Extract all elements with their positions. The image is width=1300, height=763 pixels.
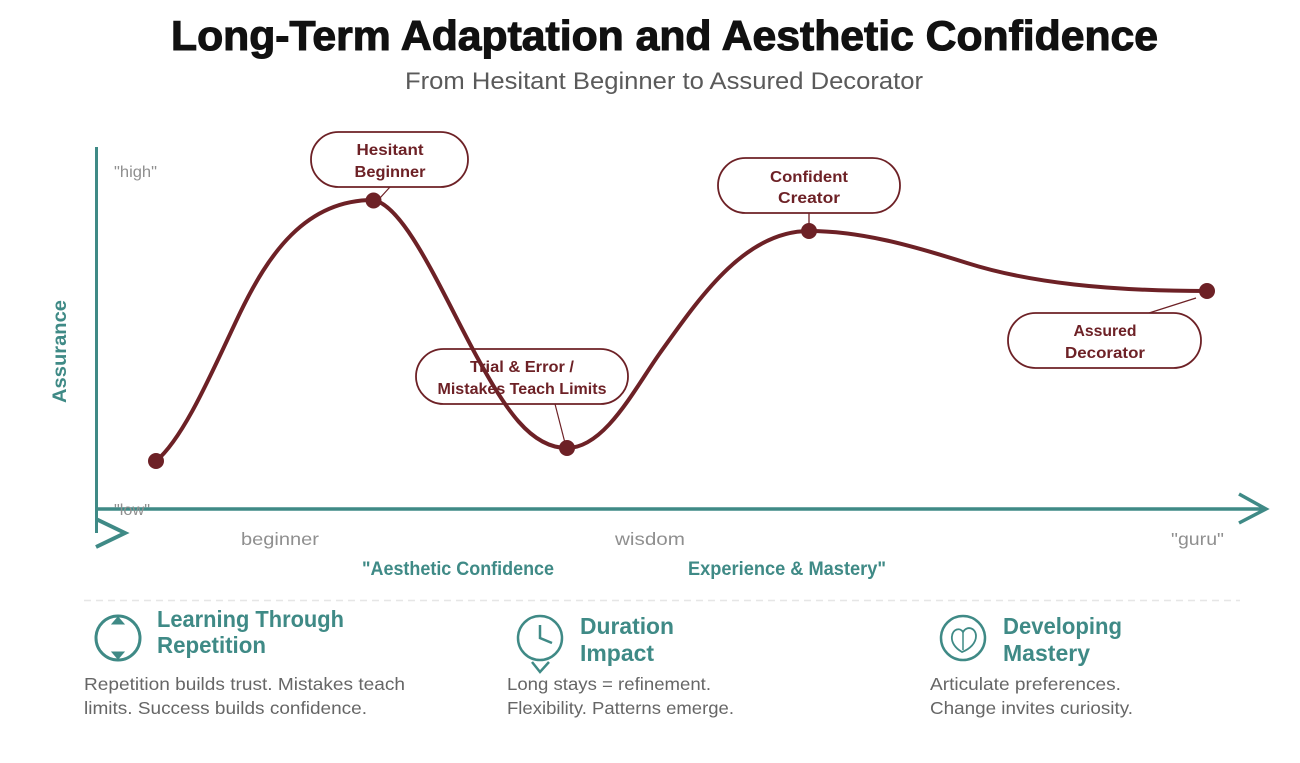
heading: Developing [1003,613,1122,639]
callout: assured decorator: Decorator [1065,345,1145,362]
heading [580,613,674,666]
body text: Repetition builds trust. Mistakes teach [84,674,405,694]
callout: confident creator [718,158,900,228]
callout: confident creator: Creator [778,190,840,207]
heading [157,606,344,658]
body text [507,674,734,718]
label: low: "low" [114,502,150,519]
icon: clock [518,616,562,672]
curve point markers [148,192,1215,469]
heading [1003,613,1122,666]
confidence curve line [156,200,1207,461]
label: guru: "guru" [1171,529,1224,549]
heading: Repetition [157,632,266,658]
body text [84,674,405,718]
callout: hesitant beginner: Hesitant [356,142,424,159]
callout: hesitant beginner: Beginner [354,164,426,181]
y axis arrow mark [96,519,125,547]
panel: duration impact [507,613,734,718]
callout: trial and error [416,349,628,443]
callout: assured decorator [1008,298,1201,368]
x axis arrow [96,494,1266,523]
callout: trial and error: Trial & Error / [470,359,575,376]
icon: repeat circle [96,616,140,660]
body text [930,674,1133,718]
y axis title: Assurance [50,300,71,403]
callout: confident creator: Confident [770,169,849,186]
panel: developing mastery [930,613,1133,718]
title: Long-Term Adaptation and Aesthetic Confidence [171,12,1158,59]
callout: hesitant beginner [311,132,468,198]
heading: Impact [580,640,654,666]
heading: Duration [580,613,674,639]
heading: Learning Through [157,606,344,632]
label: wisdom: wisdom [614,529,685,549]
body text: Change invites curiosity. [930,698,1133,718]
label: beginner: beginner [241,529,319,549]
axis caption right: Experience & Mastery" [688,559,886,580]
body text: Flexibility. Patterns emerge. [507,698,734,718]
panel: learning through repetition [84,606,405,718]
y axis [95,147,98,533]
callout: trial and error: Mistakes Teach Limits [438,381,607,398]
body text: Articulate preferences. [930,674,1121,694]
subtitle: From Hesitant Beginner to Assured Decorator [405,68,923,95]
heading: Mastery [1003,640,1090,666]
label: high: "high" [114,164,157,181]
body text: limits. Success builds confidence. [84,698,367,718]
body text: Long stays = refinement. [507,674,711,694]
chart: confidence curve [50,132,1266,580]
axis caption left: "Aesthetic Confidence [362,559,554,580]
icon: heart in circle [941,616,985,660]
callout: assured decorator: Assured [1074,323,1136,340]
